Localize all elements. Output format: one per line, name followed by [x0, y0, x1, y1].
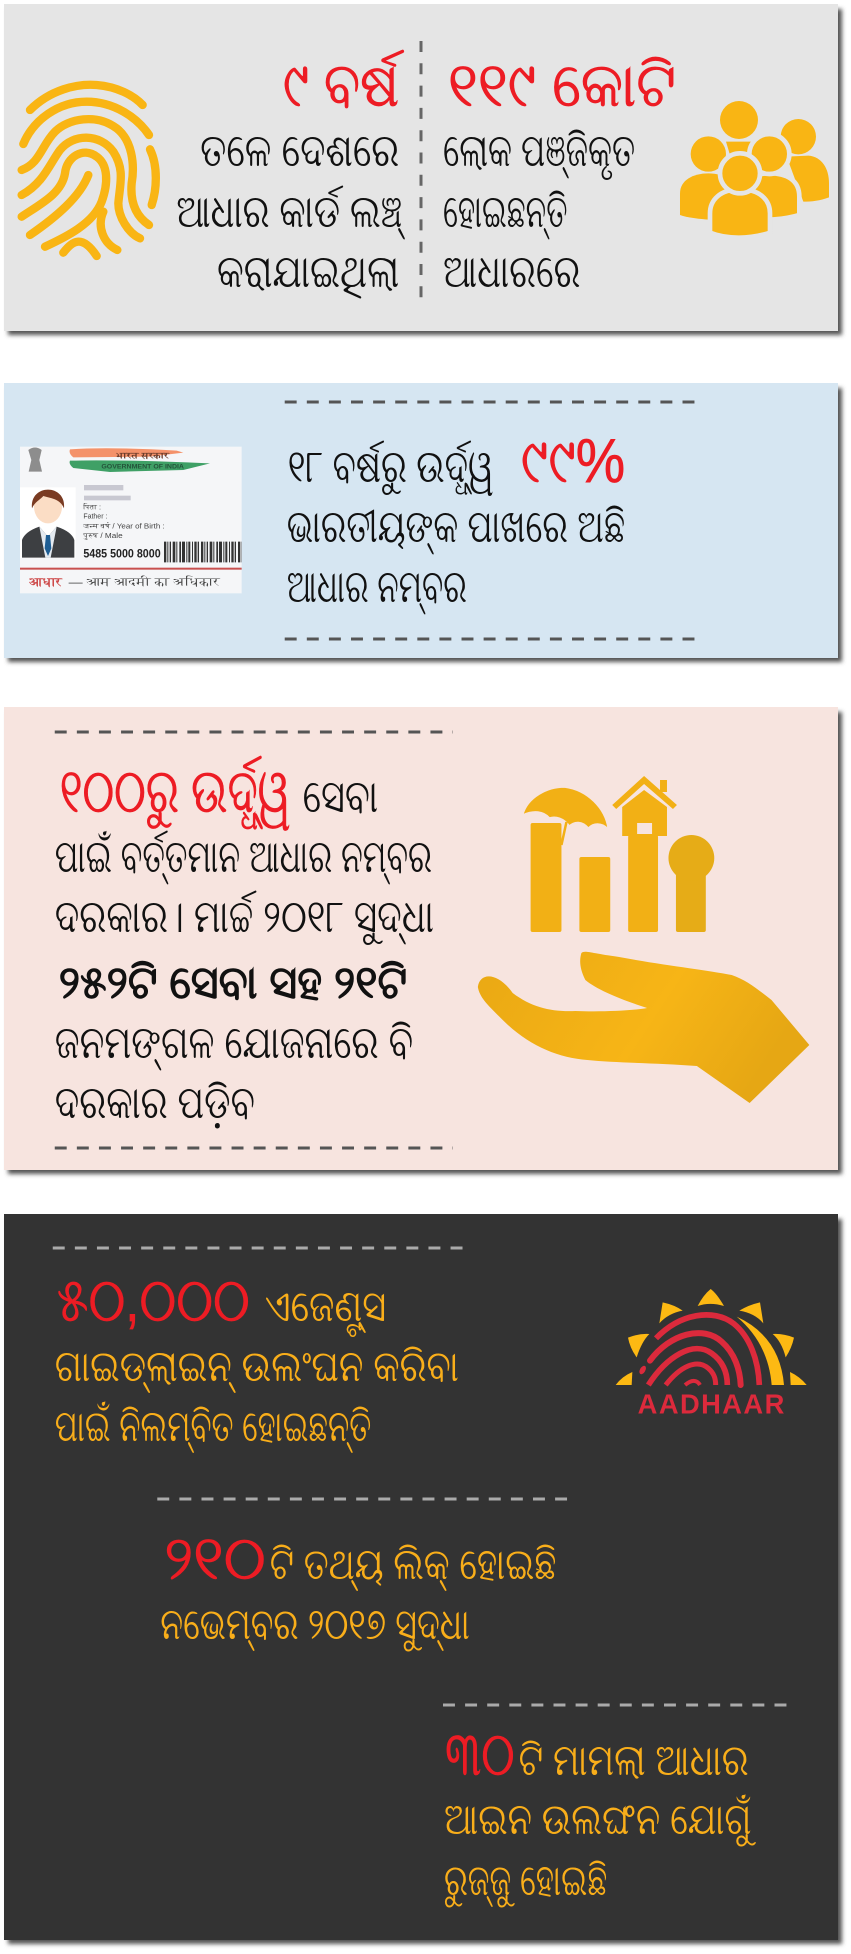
text block: services statement: ୧୦୦ରୁ ଉର୍ଦ୍ଧ୍ୱ	[60, 756, 291, 830]
text block: 50,000 agencies: ୫୦,୦୦୦	[57, 1266, 250, 1335]
text block: 210 data leaks: ଟି ତଥ୍ୟ ଲିକ୍ ହୋଇଛି	[270, 1540, 556, 1591]
image: aadhaar card: Father :	[83, 514, 107, 521]
text block: 210 data leaks: ନଭେମ୍ବର ୨୦୧୭ ସୁଦ୍ଧା	[160, 1600, 470, 1651]
content wrapper: panel three content	[55, 732, 809, 1148]
text block: left column: ତଳେ ଦେଶରେ	[200, 124, 399, 176]
text block: 210 data leaks: ୨୧୦	[164, 1524, 266, 1593]
text block: services statement: ପାଇଁ ବର୍ତ୍ତମାନ ଆଧାର ନମ୍ବର	[55, 830, 432, 885]
image: aadhaar card: पिता :	[82, 502, 101, 511]
icon: hand holding benefits	[478, 776, 809, 1103]
text block: right column: ଲୋକ ପଞ୍ଜିକୃତ	[443, 124, 635, 180]
icon: fingerprint	[22, 85, 156, 256]
panel: 99 percent	[4, 383, 842, 662]
text block: services statement: ୨୫୨ଟି ସେବା ସହ ୨୧ଟି	[59, 956, 407, 1008]
image: aadhaar card: GOVERNMENT OF INDIA	[101, 464, 184, 471]
text block: left column	[176, 124, 405, 299]
text block: 30 cases: ଆଇନ ଉଲଙ୍ଘନ ଯୋଗୁଁ	[444, 1794, 756, 1846]
text block: 30 cases: ୩୦	[445, 1720, 515, 1789]
text block: left column: ଆଧାର କାର୍ଡ ଲଞ୍ଚ୍	[176, 185, 405, 240]
text block: right column: ଆଧାରରେ	[443, 245, 580, 297]
text block: 210 data leaks	[160, 1524, 556, 1651]
text block: 50,000 agencies: ଗାଇଡ୍‌ଲାଇନ୍ ଉଲଂଘନ କରିବା	[55, 1342, 459, 1393]
text block: services statement	[55, 756, 434, 1128]
image: aadhaar card: — आम आदमी का अधिकार	[69, 575, 221, 589]
image: aadhaar card: पुरुष / Male	[82, 531, 123, 541]
text block: right column	[443, 124, 635, 297]
text block: right column: ହୋଇଛନ୍ତି	[443, 185, 567, 240]
text block: services statement: ଜନମଙ୍ଗଳ ଯୋଜନାରେ ବି	[55, 1016, 413, 1071]
content wrapper: panel two text	[285, 402, 698, 639]
text block: 99 percent statement: ୧୮ ବର୍ଷରୁ ଉର୍ଦ୍ଧ୍ୱ	[288, 440, 494, 496]
text block: 99 percent statement: ୯୯%	[521, 427, 625, 496]
logo: aadhaar: AADHAAR	[638, 1388, 785, 1419]
text block: 30 cases	[444, 1720, 756, 1907]
panel: violations	[4, 1214, 842, 1944]
panel: services	[4, 707, 842, 1174]
text block: 50,000 agencies: ଏଜେଣ୍ଟ୍ସ	[265, 1282, 386, 1337]
text block: 99 percent statement	[287, 427, 625, 615]
content wrapper: panel one text	[176, 50, 676, 299]
text block: services statement: ଦରକାର। ମାର୍ଚ୍ଚ ୨୦୧୮ ସୁଦ୍ଧା	[55, 890, 434, 945]
text block: left column: କରାଯାଇଥିଲା	[217, 245, 399, 299]
text block: 30 cases: ରୁଜ୍ଜୁ ହୋଇଛି	[444, 1856, 607, 1907]
icon: group of people	[680, 101, 829, 238]
image: aadhaar card: आधार	[28, 575, 64, 589]
text block: 99 percent statement: ଆଧାର ନମ୍ବର	[287, 560, 467, 615]
logo: aadhaar	[616, 1289, 807, 1419]
text block: services statement: ସେବା	[303, 770, 378, 822]
image: aadhaar card: जन्म वर्ष / Year of Birth :	[82, 521, 165, 530]
image: aadhaar card: 5485 5000 8000	[83, 546, 161, 560]
panel: enrolment overview	[4, 4, 842, 335]
content wrapper: panel four text	[53, 1248, 788, 1907]
text block: 50,000 agencies: ପାଇଁ ନିଲମ୍ବିତ ହୋଇଛନ୍ତି	[55, 1401, 371, 1453]
text block: 99 percent statement: ଭାରତୀୟଙ୍କ ପାଖରେ ଅଛି	[287, 500, 625, 555]
image: aadhaar card: भारत सरकार	[115, 451, 170, 461]
heading: nine years: ୯ ବର୍ଷ	[283, 50, 404, 120]
text block: 30 cases: ଟି ମାମଲା ଆଧାର	[519, 1736, 749, 1785]
text block: services statement: ଦରକାର ପଡ଼ିବ	[55, 1076, 255, 1128]
text block: 50,000 agencies	[55, 1266, 459, 1453]
image: aadhaar card	[20, 447, 242, 593]
heading: 119 crore: ୧୧୯ କୋଟି	[448, 51, 676, 120]
